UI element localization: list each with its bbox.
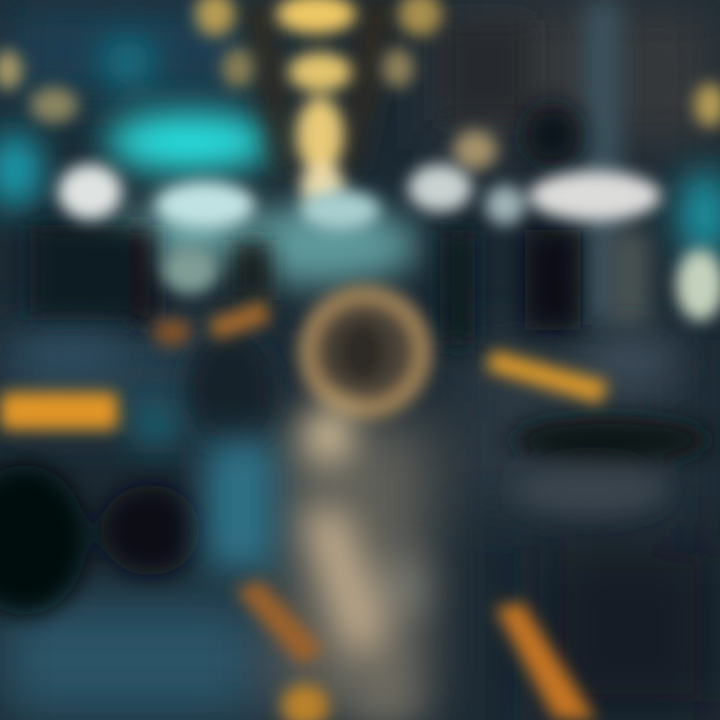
glowing floor reflection (300, 407, 424, 720)
bronze ring (307, 294, 423, 410)
ceiling lights (0, 0, 720, 207)
teal glow, upper left (0, 40, 720, 285)
blue tabletop and aisle panels (10, 335, 680, 570)
dark ceiling beams (238, 0, 620, 320)
dark silhouettes and columns (0, 103, 710, 615)
bright white windows (58, 164, 720, 321)
orange accent lights (0, 300, 608, 720)
